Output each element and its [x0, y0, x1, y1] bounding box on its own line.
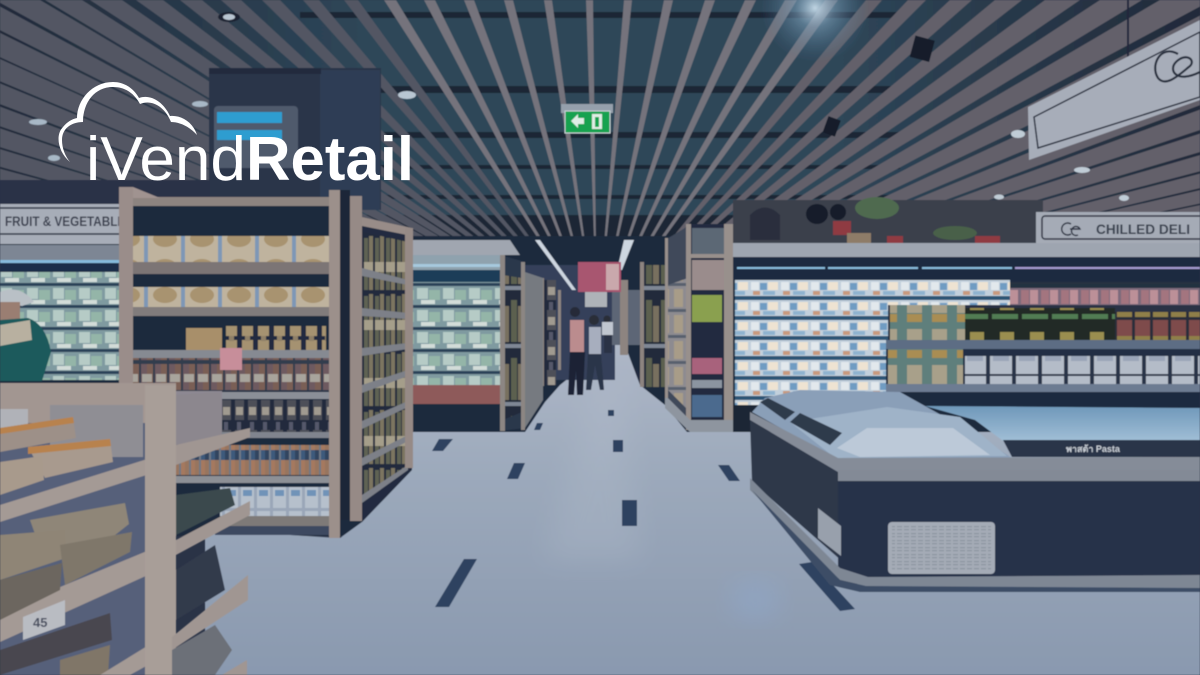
white packages row: [220, 487, 330, 516]
ceiling strip lights: [535, 240, 634, 290]
promotional hanging sign: [578, 262, 621, 307]
decor above right fridge: [733, 197, 1043, 244]
sign: fruit and vegetables: FRUIT & VEGETABLES: [5, 214, 133, 229]
shoppers: [568, 307, 613, 395]
dark plinth: [215, 526, 330, 535]
shopper in green shirt: [0, 290, 51, 381]
grey lid rim: [750, 412, 1200, 472]
floor reflections: [545, 380, 779, 618]
dark strip above left aisle: [0, 180, 210, 210]
price tag: [23, 600, 65, 640]
glass lids: [752, 390, 1012, 462]
sign: chilled deli: [1036, 212, 1200, 244]
sauce bottles row: [132, 358, 330, 391]
ventilation grille: [888, 522, 995, 574]
dark label panels: [760, 398, 795, 420]
front unit shelves: [0, 455, 162, 642]
centre produce fridge: [412, 240, 520, 432]
front face: [838, 480, 1200, 577]
front unit lower shelf: [100, 640, 157, 675]
mushroom packs on top shelf: [0, 417, 113, 495]
ceiling slats: left panel: [0, 0, 529, 237]
front unit post: [145, 385, 176, 675]
hanging store sign: [1028, 0, 1200, 160]
floor: [205, 345, 1200, 675]
centre aisle side shelving: [500, 255, 543, 431]
side face: [750, 420, 868, 584]
main gondola shelf unit: [119, 187, 362, 538]
chest freezer: [750, 390, 1200, 592]
ceiling spotlight flare: [760, 0, 870, 63]
ceiling beams: [300, 12, 900, 236]
front display unit: back panel: [0, 383, 176, 675]
dark column with insect lamp: [209, 68, 381, 210]
jars row: [132, 328, 330, 350]
wooden frame: [119, 187, 133, 383]
right end-cap gondola: [665, 224, 733, 432]
exit sign: [561, 104, 613, 133]
far aisle: background shelves: [525, 262, 668, 387]
ceiling slats: right panel: [676, 0, 1200, 234]
side gondola shelf unit: [362, 217, 413, 522]
company logo: [59, 82, 414, 194]
bottled oil row: [220, 400, 330, 432]
ceiling lights: [29, 12, 1129, 201]
sign: chilled deli: CHILLED DELI: [1096, 221, 1190, 237]
biscuit boxes, second row: [132, 287, 330, 307]
logo: wordmark: iVendRetail: [86, 125, 414, 194]
side panel: [818, 508, 841, 556]
chilled meat and dry goods shelves: [886, 282, 1200, 408]
left produce fridge: [0, 245, 125, 380]
base strip: [750, 478, 1200, 588]
front unit side shelves: [172, 392, 250, 675]
chest freezer: พาสต้า Pasta: [1066, 444, 1121, 454]
sign: fruit and vegetables: [0, 204, 152, 244]
logo: cloud outline: [59, 82, 197, 162]
ceiling slats: centre: [384, 0, 838, 237]
floor shadow: [752, 490, 1200, 592]
open freezer interior: [925, 406, 1200, 446]
cookie boxes, top row: [132, 236, 330, 262]
egg cartons: [0, 503, 132, 675]
floor lane markers: [432, 410, 855, 611]
ceiling background: [0, 0, 1200, 240]
price tag: 45: [33, 615, 47, 630]
right refrigerated wall: [733, 243, 1200, 432]
lower scene base: [0, 236, 1200, 536]
orange sauce row: [176, 445, 330, 475]
